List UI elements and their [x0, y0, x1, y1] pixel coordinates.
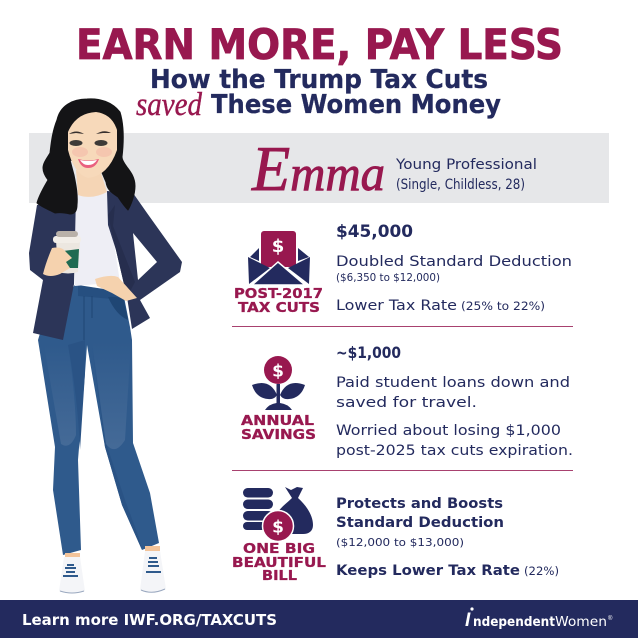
- icon: envelope with dollar card: [248, 231, 310, 285]
- icon label: ANNUAL: [241, 413, 314, 429]
- section 3: one big beautiful bill: [232, 487, 559, 584]
- panel: name band: [29, 133, 609, 204]
- section 2: annual savings: [241, 343, 573, 459]
- descriptor: (Single, Childless, 28): [396, 177, 525, 193]
- section text: [336, 343, 573, 459]
- subtitle: saved: [136, 87, 202, 123]
- icon label: SAVINGS: [241, 427, 316, 443]
- icon label: POST-2017: [234, 286, 323, 302]
- section text: Worried about losing $1,000: [336, 423, 561, 439]
- section text: Doubled Standard Deduction: [336, 254, 572, 270]
- shirt: [74, 190, 120, 286]
- neck: [76, 170, 107, 197]
- section text: [336, 222, 572, 314]
- hair: [37, 99, 135, 214]
- icon: coins and money bag: $: [272, 518, 284, 538]
- logo: ndependent: [473, 614, 555, 630]
- section text: saved for travel.: [336, 395, 477, 411]
- icon label: TAX CUTS: [238, 300, 320, 316]
- subtitle: [136, 65, 501, 123]
- icon label: BEAUTIFUL: [232, 555, 326, 571]
- section text: (22%): [524, 564, 559, 578]
- section text: Lower Tax Rate: [336, 298, 457, 314]
- section text: Paid student loans down and: [336, 375, 570, 391]
- illustration: woman with coffee: [29, 99, 182, 593]
- section text: ($6,350 to $12,000): [336, 271, 440, 284]
- icon label: ONE BIG: [243, 541, 315, 557]
- icon: money plant: $: [272, 362, 284, 382]
- section text: ($12,000 to $13,000): [336, 536, 464, 549]
- section text: post-2025 tax cuts expiration.: [336, 443, 573, 459]
- section text: Protects and Boosts: [336, 496, 503, 512]
- section text: Keeps Lower Tax Rate: [336, 563, 520, 579]
- footer call to action: Learn more IWF.ORG/TAXCUTS: [22, 611, 277, 629]
- title: EARN MORE, PAY LESS: [76, 20, 563, 69]
- icon: coins and money bag: [243, 487, 313, 542]
- icon label: [232, 541, 326, 584]
- logo: Women: [555, 614, 607, 630]
- subtitle: These Women Money: [211, 90, 501, 120]
- subtitle: How the Trump Tax Cuts: [150, 65, 488, 95]
- icon label: BILL: [262, 568, 297, 584]
- jacket: [29, 191, 182, 340]
- icon: money plant: [252, 356, 305, 410]
- icon label: [234, 286, 323, 316]
- descriptor: [395, 157, 537, 193]
- shoes: [59, 546, 166, 593]
- section text: [336, 496, 559, 579]
- footer bar: [0, 600, 638, 638]
- jeans: [38, 285, 159, 555]
- logo: [465, 607, 613, 631]
- logo: ®: [608, 615, 613, 622]
- face: [68, 112, 117, 178]
- hand holding cup: [43, 248, 72, 276]
- hand on hip: [95, 276, 137, 301]
- name: Emma: [251, 133, 385, 204]
- section text: ~$1,000: [336, 343, 401, 362]
- section 1: post-2017 tax cuts: [234, 222, 572, 316]
- icon: envelope with dollar card: $: [272, 236, 284, 257]
- descriptor: Young Professional: [395, 157, 537, 173]
- section text: (25% to 22%): [461, 299, 545, 313]
- section text: Standard Deduction: [336, 515, 504, 531]
- section text: $45,000: [336, 222, 413, 241]
- logo: I: [465, 610, 471, 631]
- icon label: [241, 413, 316, 443]
- coffee cup: [53, 231, 81, 274]
